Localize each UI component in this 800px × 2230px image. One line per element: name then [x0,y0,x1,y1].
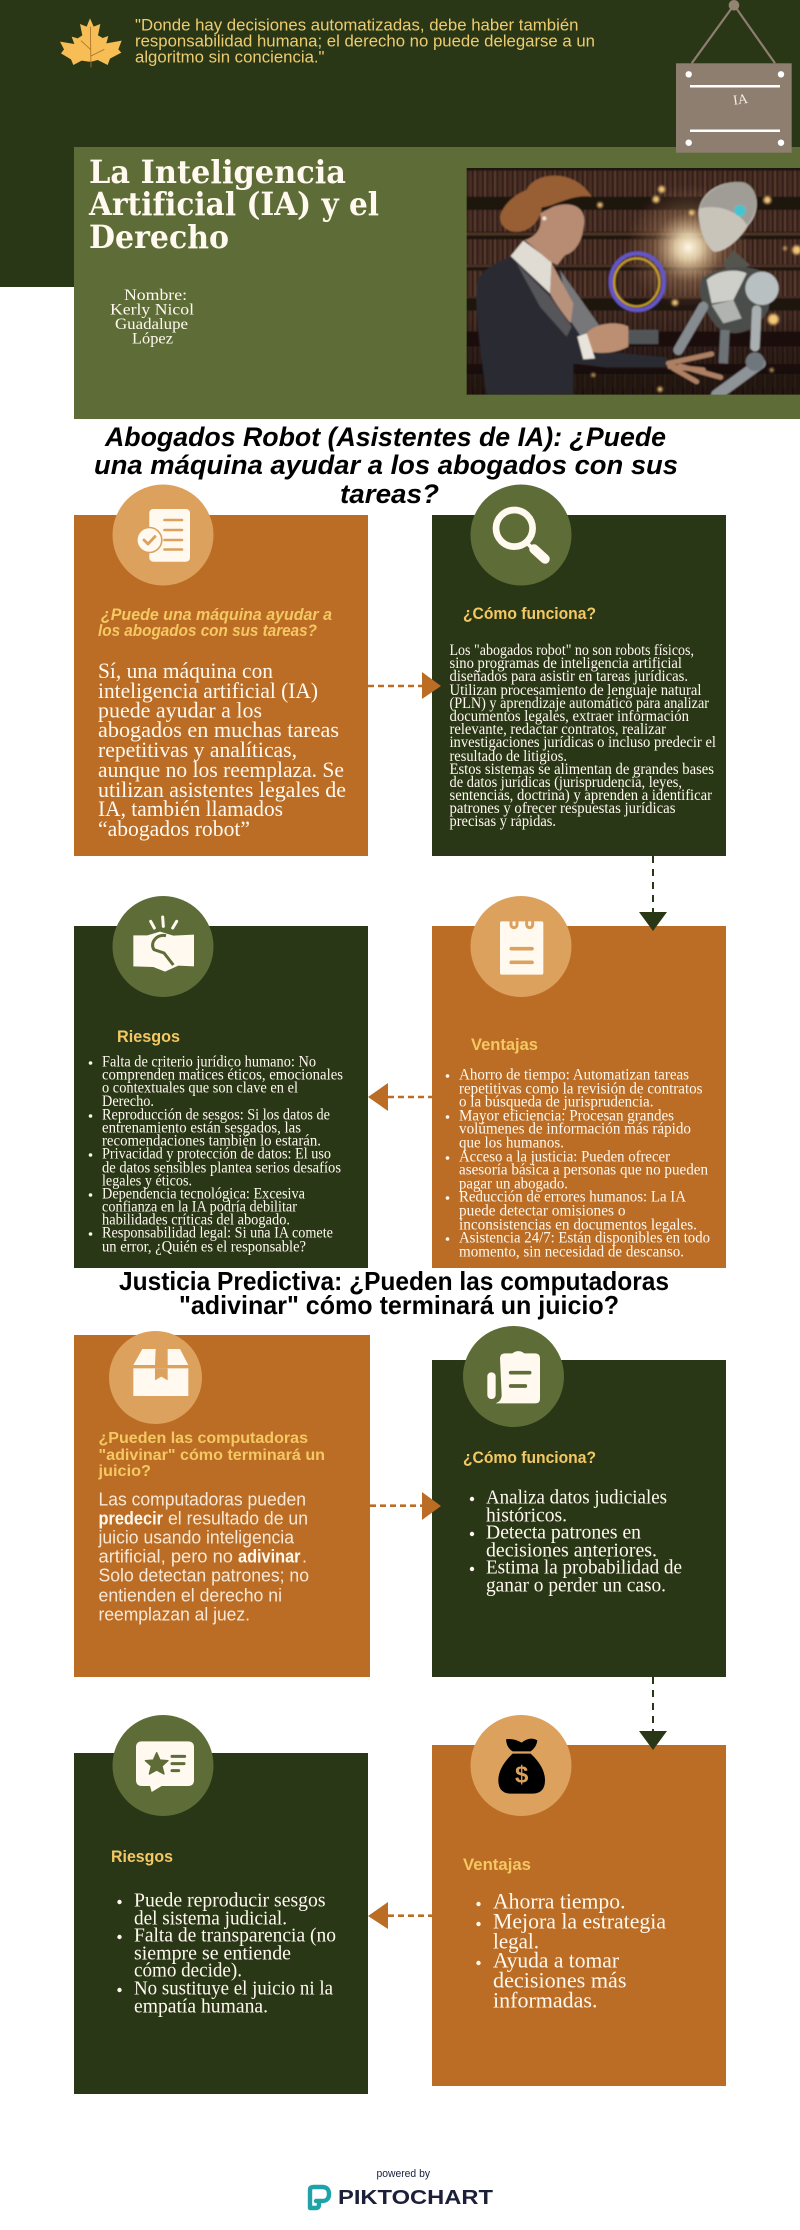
heading: abogados robot: Abogados Robot (Asistentes de IA): ¿Puede [104,422,666,452]
title: Artificial (IA) y el [88,185,379,223]
list: No sustituye el juicio ni la [134,1978,333,2000]
list: Reducción de errores humanos: La IA [459,1188,687,1205]
list: asesoría básica a personas que no pueden [459,1162,708,1179]
list: de datos sensibles plantea serios desafíos [102,1160,341,1177]
icon: notepad [500,917,543,975]
ring [611,253,664,310]
text block: repetitivas y analíticas, [98,737,297,762]
title: Derecho [89,218,229,256]
text block [98,658,346,841]
text block: puede ayudar a los [98,698,262,722]
icon: chat with star [136,1741,194,1792]
list: Detecta patrones en [486,1522,641,1544]
icon: box [133,1349,188,1396]
text block [450,642,716,830]
heading: justicia predictiva [119,1266,669,1320]
text block: Sí, una máquina con [98,658,273,683]
author name: Nombre: [124,287,187,304]
text block: patrones y ofrecer respuestas jurídicas [450,800,676,817]
text block: entienden el derecho ni [98,1585,282,1605]
heading [97,1430,325,1480]
text block [98,1490,309,1625]
list: que los humanos. [459,1134,564,1151]
text block: precisas y rápidas. [450,813,556,830]
panel: ventajas 1 [432,896,726,1268]
list [476,1889,666,2013]
list: Falta de transparencia (no [134,1925,336,1947]
list: siempre se entiende [134,1943,291,1965]
list: Puede reproducir sesgos [134,1890,326,1912]
list: pagar un abogado. [459,1175,568,1192]
list: Acceso a la justicia: Pueden ofrecer [459,1148,671,1165]
text block: IA, también llamados [98,796,283,821]
heading: "adivinar" cómo terminará un [98,1447,325,1464]
panel: ventajas 2 [432,1715,726,2086]
list: Privacidad y protección de datos: El uso [102,1146,331,1163]
list: Asistencia 24/7: Están disponibles en todo [459,1229,710,1246]
panel: cómo funciona 2 [432,1326,726,1677]
list [117,1890,336,2018]
robot [723,250,750,269]
list: Mayor eficiencia: Procesan grandes [459,1107,674,1124]
heading: justicia predictiva: Justicia Predictiva: ¿Pueden las computadoras [119,1266,669,1296]
quote [135,16,595,67]
list: Reproducción de sesgos: Si los datos de [102,1107,330,1124]
text block: documentos legales, extraer información [450,708,689,725]
footer: piktochart branding: powered by [376,2168,430,2180]
icon: money bag [498,1739,545,1794]
title [88,153,379,256]
list: o contextuales que son clave en el [102,1080,298,1097]
panel: pueden las computadoras adivinar [74,1331,370,1677]
heading [98,606,332,640]
list: repetitivas como la revisión de contratos [459,1080,702,1097]
list [470,1487,682,1597]
arrow: left 2 [368,1902,432,1929]
list [89,1054,343,1256]
text block: (PLN) y aprendizaje automático para analizar [450,695,710,712]
list: Estima la probabilidad de [486,1557,682,1579]
list: decisiones más [493,1968,626,1993]
text block: resultado de litigios. [450,748,567,765]
list: habilidades críticas del abogado. [102,1212,290,1229]
heading: ¿Puede una máquina ayudar a [101,606,332,624]
heading: Ventajas [471,1036,538,1054]
quote: algoritmo sin conciencia." [135,48,324,67]
title panel [74,147,800,419]
author name [110,287,195,348]
text block: el resultado de un [168,1509,308,1529]
text block: sino programas de inteligencia artificial [450,655,682,672]
icon: money bag: $ [515,1761,528,1788]
text block: Los "abogados robot" no son robots físicos, [450,642,694,659]
header dark background [0,0,800,287]
panel: cómo funciona 1 [432,484,726,856]
list: empatía humana. [134,1996,268,2018]
heading: Riesgos [117,1028,180,1046]
author name: Guadalupe [115,316,188,333]
icon: magnifier [496,510,545,559]
title: La Inteligencia [89,153,346,191]
text block: . [302,1547,307,1567]
list: o la búsqueda de jurisprudencia. [459,1093,654,1110]
text block: diseñados para asistir en tareas jurídicas. [450,668,688,685]
list: cómo decide). [134,1960,242,1982]
list: un error, ¿Quién es el responsable? [102,1239,306,1256]
text block: utilizan asistentes legales de [98,777,346,802]
list: ganar o perder un caso. [486,1575,666,1597]
arrow: down 2 [652,1677,654,1731]
list: del sistema judicial. [134,1908,287,1930]
panel: riesgos 2 [74,1715,368,2094]
list: momento, sin necesidad de descanso. [459,1243,684,1260]
text block: juicio usando inteligencia [98,1528,295,1548]
heading: ¿Pueden las computadoras [98,1430,308,1447]
text block: Solo detectan patrones; no [98,1566,309,1586]
list: volúmenes de información más rápido [459,1121,691,1138]
text block: relevante, redactar contratos, realizar [450,721,667,738]
list: legales y éticos. [102,1173,192,1190]
text block: aunque no los reemplaza. Se [98,757,344,782]
text block: reemplazan al juez. [98,1605,250,1625]
text block: Las computadoras pueden [98,1490,306,1510]
list: Dependencia tecnológica: Excesiva [102,1186,305,1203]
panel: riesgos 1 [74,896,368,1268]
arrow: down 1 [652,856,654,912]
list: Responsabilidad legal: Si una IA comete [102,1225,333,1242]
arrow: right 2 [370,1492,441,1520]
author name: López [132,330,173,348]
text block: predecir [98,1509,163,1529]
list: Ayuda a tomar [493,1948,619,1973]
list: Ahorro de tiempo: Automatizan tareas [459,1067,689,1084]
heading: Riesgos [111,1848,173,1866]
heading: ¿Cómo funciona? [463,605,596,623]
woman [476,257,670,394]
hanging sign [676,0,792,153]
heading: Ventajas [463,1856,531,1874]
arrowhead: down 1 [639,912,667,931]
icon: handshake [133,917,194,972]
text block: inteligencia artificial (IA) [98,678,318,703]
heading: juicio? [97,1463,151,1480]
list: informadas. [493,1988,598,2013]
text block: “abogados robot” [98,816,250,841]
heading: ¿Cómo funciona? [463,1449,596,1467]
text block: adivinar [238,1547,300,1567]
list: decisiones anteriores. [486,1540,657,1562]
list: confianza en la IA podría debilitar [102,1199,298,1216]
text block: abogados en muchas tareas [98,717,339,742]
text block: Estos sistemas se alimentan de grandes bases [450,761,714,778]
text block: investigaciones jurídicas o incluso predecir el [450,734,716,751]
author name: Kerly Nicol [110,302,195,318]
list: inconsistencias en documentos legales. [459,1216,697,1233]
list [446,1067,710,1260]
list: Derecho. [102,1093,154,1110]
hanging sign: IA [732,92,750,109]
heading: abogados robot: tareas? [340,479,439,509]
list: recomendaciones también lo estarán. [102,1133,321,1150]
list: puede detectar omisiones o [459,1202,626,1219]
footer: piktochart branding [310,2168,493,2209]
quote: responsabilidad humana; el derecho no puede delegarse a un [135,32,595,51]
list: Ahorra tiempo. [493,1889,626,1914]
arrow: right 1 [368,672,441,699]
heading: los abogados con sus tareas? [98,622,317,640]
panel: puede una máquina ayudar [74,484,368,856]
arrow: left 1 [368,1083,432,1111]
icon: document with check [137,509,190,562]
text block: de datos jurídicas (jurisprudencia, leyes, [450,774,682,791]
icon: maple leaf [60,18,122,67]
icon: scroll [487,1351,540,1403]
list: entrenamiento están sesgados, las [102,1120,301,1137]
heading: abogados robot: una máquina ayudar a los abogados con sus [94,450,678,480]
heading: justicia predictiva: "adivinar" cómo terminará un juicio? [179,1290,619,1320]
text block: Utilizan procesamiento de lenguaje natural [450,682,702,699]
list: Analiza datos judiciales [486,1487,667,1509]
text block: artificial, pero no [98,1547,233,1567]
text block: sentencias, doctrina) y aprenden a identificar [450,787,713,804]
list: Mejora la estrategia [493,1909,666,1934]
quote: "Donde hay decisiones automatizadas, debe haber también [135,16,578,35]
footer: piktochart branding: PIKTOCHART [338,2187,493,2209]
list: Falta de criterio jurídico humano: No [102,1054,316,1071]
list: legal. [493,1929,539,1954]
list: históricos. [486,1505,567,1527]
heading: abogados robot [94,422,678,509]
photo: lawyer and robot in a library [460,161,800,401]
arrowhead: down 2 [639,1731,667,1750]
list: comprenden matices éticos, emocionales [102,1067,343,1084]
